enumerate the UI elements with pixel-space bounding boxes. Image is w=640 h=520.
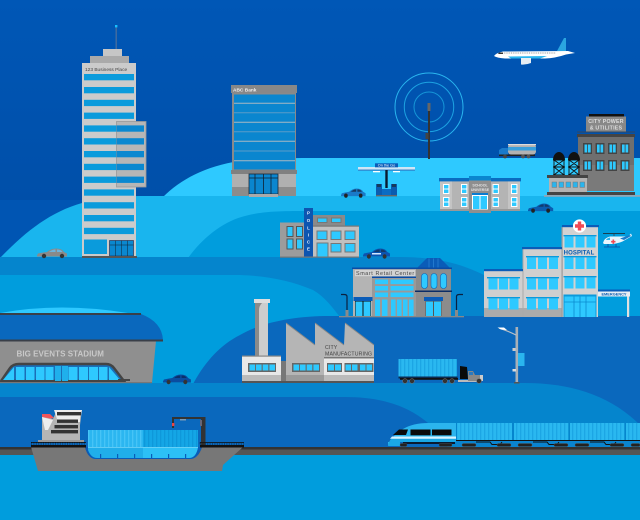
water towers [553,152,580,175]
hospital label: HOSPITAL [564,250,595,256]
bank label: ABC Bank [233,88,257,94]
emergency canopy [598,290,630,317]
factory label: CITY [325,345,338,351]
signal tower with radio rings [395,73,463,159]
stadium label: BIG EVENTS STADIUM [16,350,104,358]
hill: dark blue layer [193,316,640,450]
bank building: ABC Bank [231,85,297,197]
utilities sign [588,119,624,132]
locomotive [388,423,456,446]
container truck [398,359,483,383]
office tower: 123 Business Place [82,25,146,258]
smart retail center [339,258,464,317]
freight containers [457,423,640,440]
ship deck railings [31,442,244,448]
emergency canopy: EMERGENCY [601,292,627,297]
freight train [388,423,640,447]
ship containers [88,430,198,459]
school sign [471,184,490,192]
street lamps [341,294,463,312]
dark blue car near school [528,203,553,213]
water [0,455,640,520]
factory label: MANUFACTURING [325,352,372,358]
gas station: On the Go: On the Go [378,164,395,168]
sky background [0,0,640,200]
police sign: E [307,246,310,252]
gas station: On the Go [358,163,415,196]
dark blue car by stadium [163,374,191,384]
factory label [325,345,372,358]
hill: lighter foreground for stadium [0,275,340,390]
utilities sign: CITY POWER [588,119,624,125]
police station [280,208,359,258]
school sign: SCHOOL [472,184,488,188]
hill: dark blue waterfront [0,397,450,450]
school building [439,176,521,213]
police sign: L [307,226,310,230]
power and utilities building [544,114,640,197]
ship superstructure [38,410,84,442]
hill: sky blue layer [0,196,640,258]
tower label: 123 Business Place [85,67,127,73]
stadium window arch [1,364,130,381]
blue car at gas station [341,188,366,198]
icon: red cross sign [573,219,586,233]
police sign: P [307,210,310,216]
hill: deeper blue band [0,257,530,317]
grey car [37,248,67,258]
train undercarriage [400,440,640,447]
hill: bright cyan back layer [163,158,640,197]
police sign: I [308,232,309,238]
retail sign: Smart Retail Center [356,271,415,277]
police car [363,248,390,259]
cargo ship [31,410,244,471]
helicopter [603,234,632,247]
rail track [0,447,640,455]
utilities sign: & UTILITIES [590,126,623,132]
stadium: Big Events Stadium [0,308,163,383]
smart street light [498,327,524,384]
police sign: O [307,218,311,223]
ship crane [172,417,206,449]
hospital [484,219,630,317]
police sign: C [307,240,311,244]
police sign [307,210,311,252]
school sign: UNIVERSE [471,188,490,192]
fuel tanker truck [499,144,536,158]
hill: lower blue band [0,383,640,450]
factory: City Manufacturing [242,299,374,383]
airplane [494,38,575,65]
hill: mid blue layer [188,211,640,330]
